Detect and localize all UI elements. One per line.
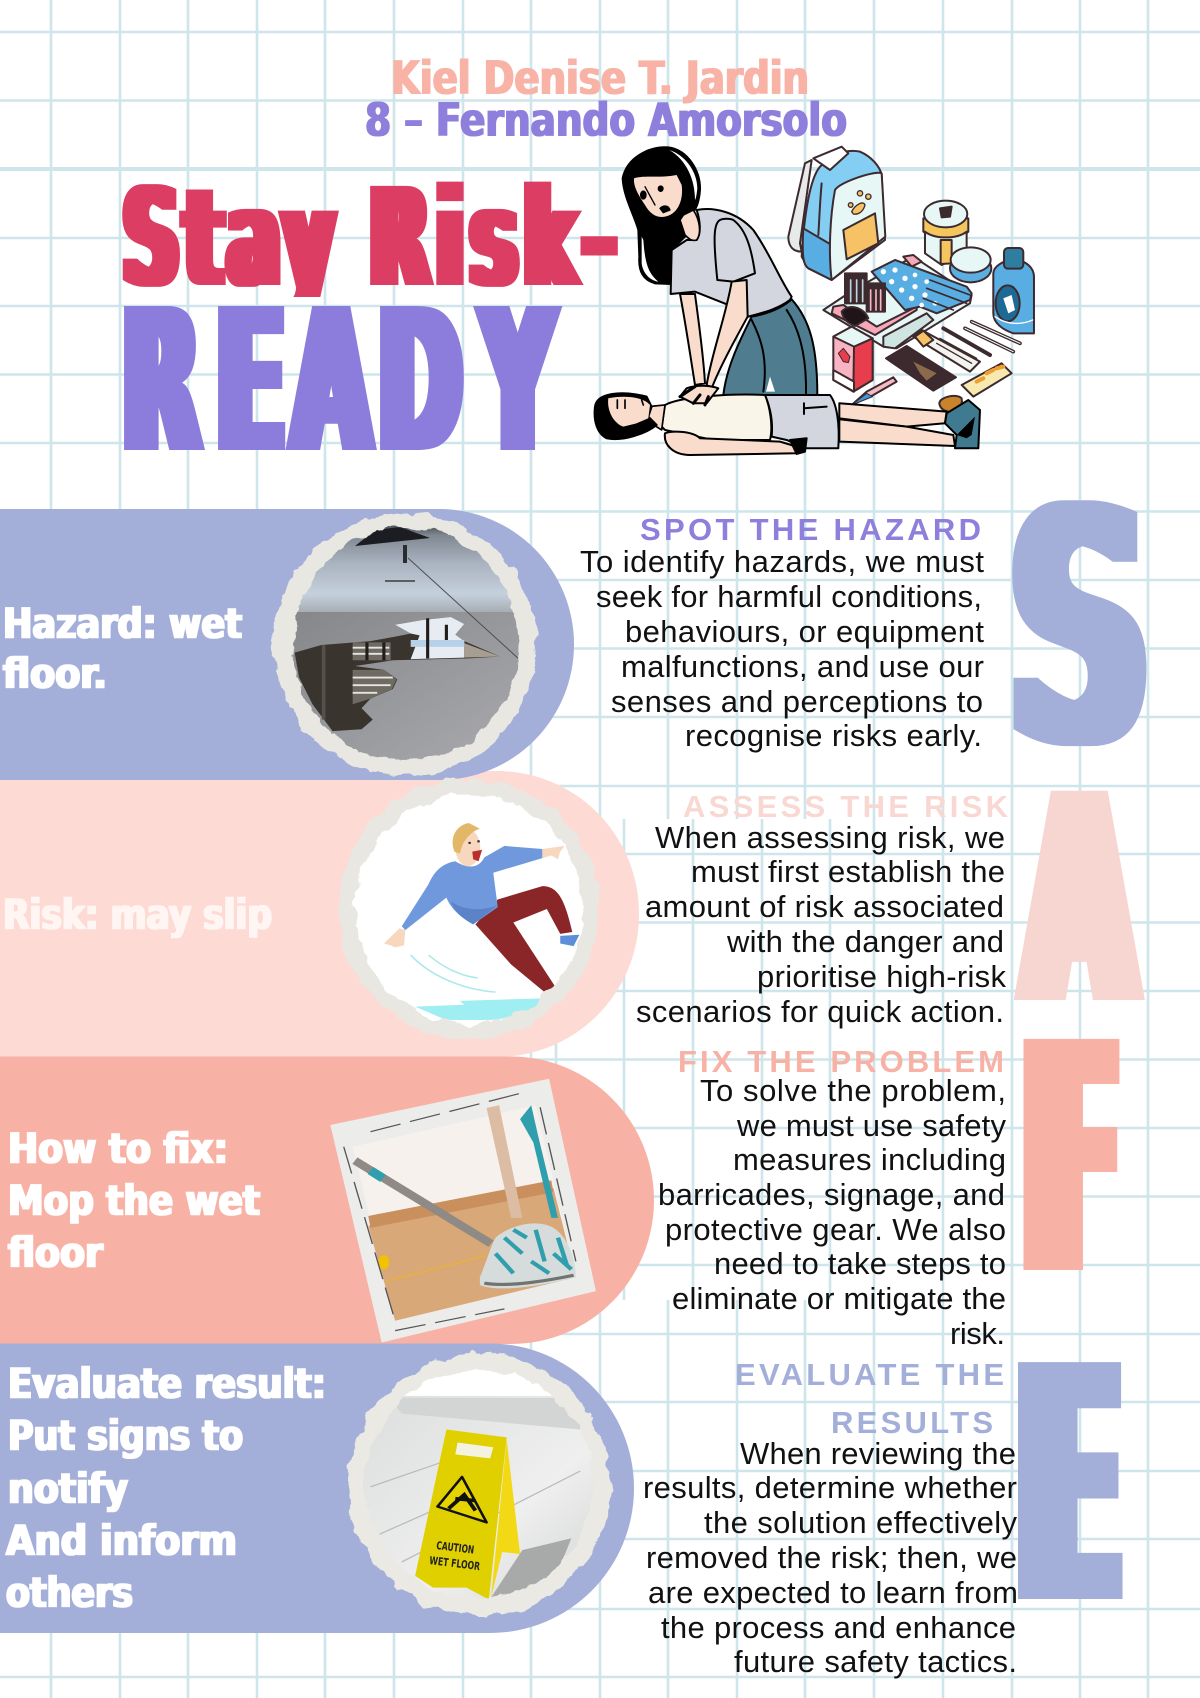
panel: how to fix band background bbox=[0, 1056, 654, 1344]
band label: risk: Risk: may slip bbox=[3, 890, 272, 939]
band label: evaluate result: And inform bbox=[6, 1516, 237, 1565]
text block: evaluate the results: the process and enhance bbox=[661, 1610, 1016, 1645]
text block: assess the risk: amount of risk associated bbox=[645, 889, 1004, 924]
text block: assess the risk bbox=[636, 789, 1009, 1029]
text block: fix the problem: risk. bbox=[950, 1316, 1005, 1351]
text block: spot the hazard: behaviours, or equipment bbox=[625, 614, 984, 649]
text block: evaluate the results: removed the risk; then, we bbox=[646, 1540, 1017, 1575]
illustration: first aid kit items bbox=[788, 147, 1034, 412]
class and section: 8 – Fernando Amorsolo bbox=[365, 93, 847, 147]
text block: spot the hazard: recognise risks early. bbox=[685, 718, 982, 753]
text block: spot the hazard: To identify hazards, we must bbox=[580, 544, 984, 579]
text block: spot the hazard: senses and perceptions to bbox=[611, 684, 983, 719]
text block: assess the risk: prioritise high-risk bbox=[757, 959, 1006, 994]
illustration: patient's legs and shoes bbox=[839, 400, 980, 448]
text block: fix the problem: eliminate or mitigate the bbox=[672, 1281, 1006, 1316]
illustration: person slipping in torn paper circle bbox=[339, 779, 600, 1040]
band label: evaluate result: notify bbox=[8, 1464, 128, 1513]
band label: how to fix: How to fix: bbox=[8, 1124, 228, 1173]
text block: evaluate the results: future safety tactics. bbox=[734, 1644, 1017, 1679]
band label: evaluate result: others bbox=[6, 1568, 133, 1617]
text block: assess the risk: ASSESS THE RISK bbox=[683, 789, 1009, 824]
text block: assess the risk: When assessing risk, we bbox=[655, 820, 1005, 855]
text block: evaluate the results: are expected to learn from bbox=[648, 1575, 1018, 1610]
text block: spot the hazard: malfunctions, and use our bbox=[621, 649, 984, 684]
illustration: rescuer performing CPR on a person bbox=[595, 147, 839, 455]
band label: evaluate result: Put signs to bbox=[8, 1411, 243, 1460]
text block: evaluate the results: EVALUATE THE bbox=[735, 1357, 1004, 1392]
title: Stay Risk-: Risk- bbox=[370, 159, 623, 317]
text block: fix the problem: To solve the problem, bbox=[700, 1073, 1006, 1108]
text block: fix the problem: measures including bbox=[733, 1142, 1006, 1177]
text block: evaluate the results: RESULTS bbox=[831, 1405, 993, 1440]
text block: fix the problem: protective gear. We also bbox=[665, 1212, 1006, 1247]
photo: yellow wet floor caution sign in torn paper circle: WET FLOOR bbox=[429, 1554, 481, 1573]
title: Stay Risk- bbox=[122, 182, 618, 297]
band label: evaluate result bbox=[6, 1359, 326, 1617]
photo: wet floor puddle in torn paper circle bbox=[274, 514, 536, 776]
text block: fix the problem: FIX THE PROBLEM bbox=[678, 1044, 1004, 1079]
text block: spot the hazard: seek for harmful conditions, bbox=[596, 579, 982, 614]
text block: evaluate the results: the solution effectively bbox=[704, 1505, 1018, 1540]
photo: yellow wet floor caution sign in torn paper circle: CAUTION bbox=[436, 1539, 475, 1557]
panel: hazard band background bbox=[0, 509, 639, 1057]
text block: fix the problem: need to take steps to bbox=[714, 1246, 1006, 1281]
panel: evaluate band background bbox=[0, 1344, 634, 1633]
text block: fix the problem: barricades, signage, and bbox=[658, 1177, 1005, 1212]
text block: spot the hazard bbox=[580, 512, 984, 753]
band label: how to fix bbox=[8, 1124, 260, 1277]
text block: evaluate the results: results, determine whether bbox=[643, 1470, 1017, 1505]
band label: hazard: floor. bbox=[3, 649, 107, 698]
title: Stay Risk-: Stay bbox=[124, 159, 340, 317]
text block: fix the problem bbox=[658, 1044, 1006, 1351]
title: READY: READY bbox=[123, 267, 555, 497]
photo: mop on wooden floor in torn frame bbox=[330, 1079, 596, 1342]
text block: evaluate the results bbox=[643, 1357, 1018, 1679]
band label: how to fix: floor bbox=[8, 1228, 103, 1277]
band label: evaluate result: Evaluate result: bbox=[8, 1359, 326, 1408]
text block: spot the hazard: SPOT THE HAZARD bbox=[640, 512, 981, 547]
text block: assess the risk: scenarios for quick action. bbox=[636, 994, 1004, 1029]
text block: assess the risk: must first establish the bbox=[691, 854, 1005, 889]
text block: evaluate the results: When reviewing the bbox=[740, 1436, 1016, 1471]
band label: how to fix: Mop the wet bbox=[8, 1176, 260, 1225]
text block: assess the risk: with the danger and bbox=[726, 924, 1004, 959]
photo: yellow wet floor caution sign in torn paper circle bbox=[348, 1354, 610, 1616]
band label: hazard bbox=[3, 599, 242, 698]
band label: hazard: Hazard: wet bbox=[3, 599, 242, 648]
text block: fix the problem: we must use safety bbox=[736, 1108, 1006, 1143]
author name: Kiel Denise T. Jardin bbox=[391, 51, 809, 105]
